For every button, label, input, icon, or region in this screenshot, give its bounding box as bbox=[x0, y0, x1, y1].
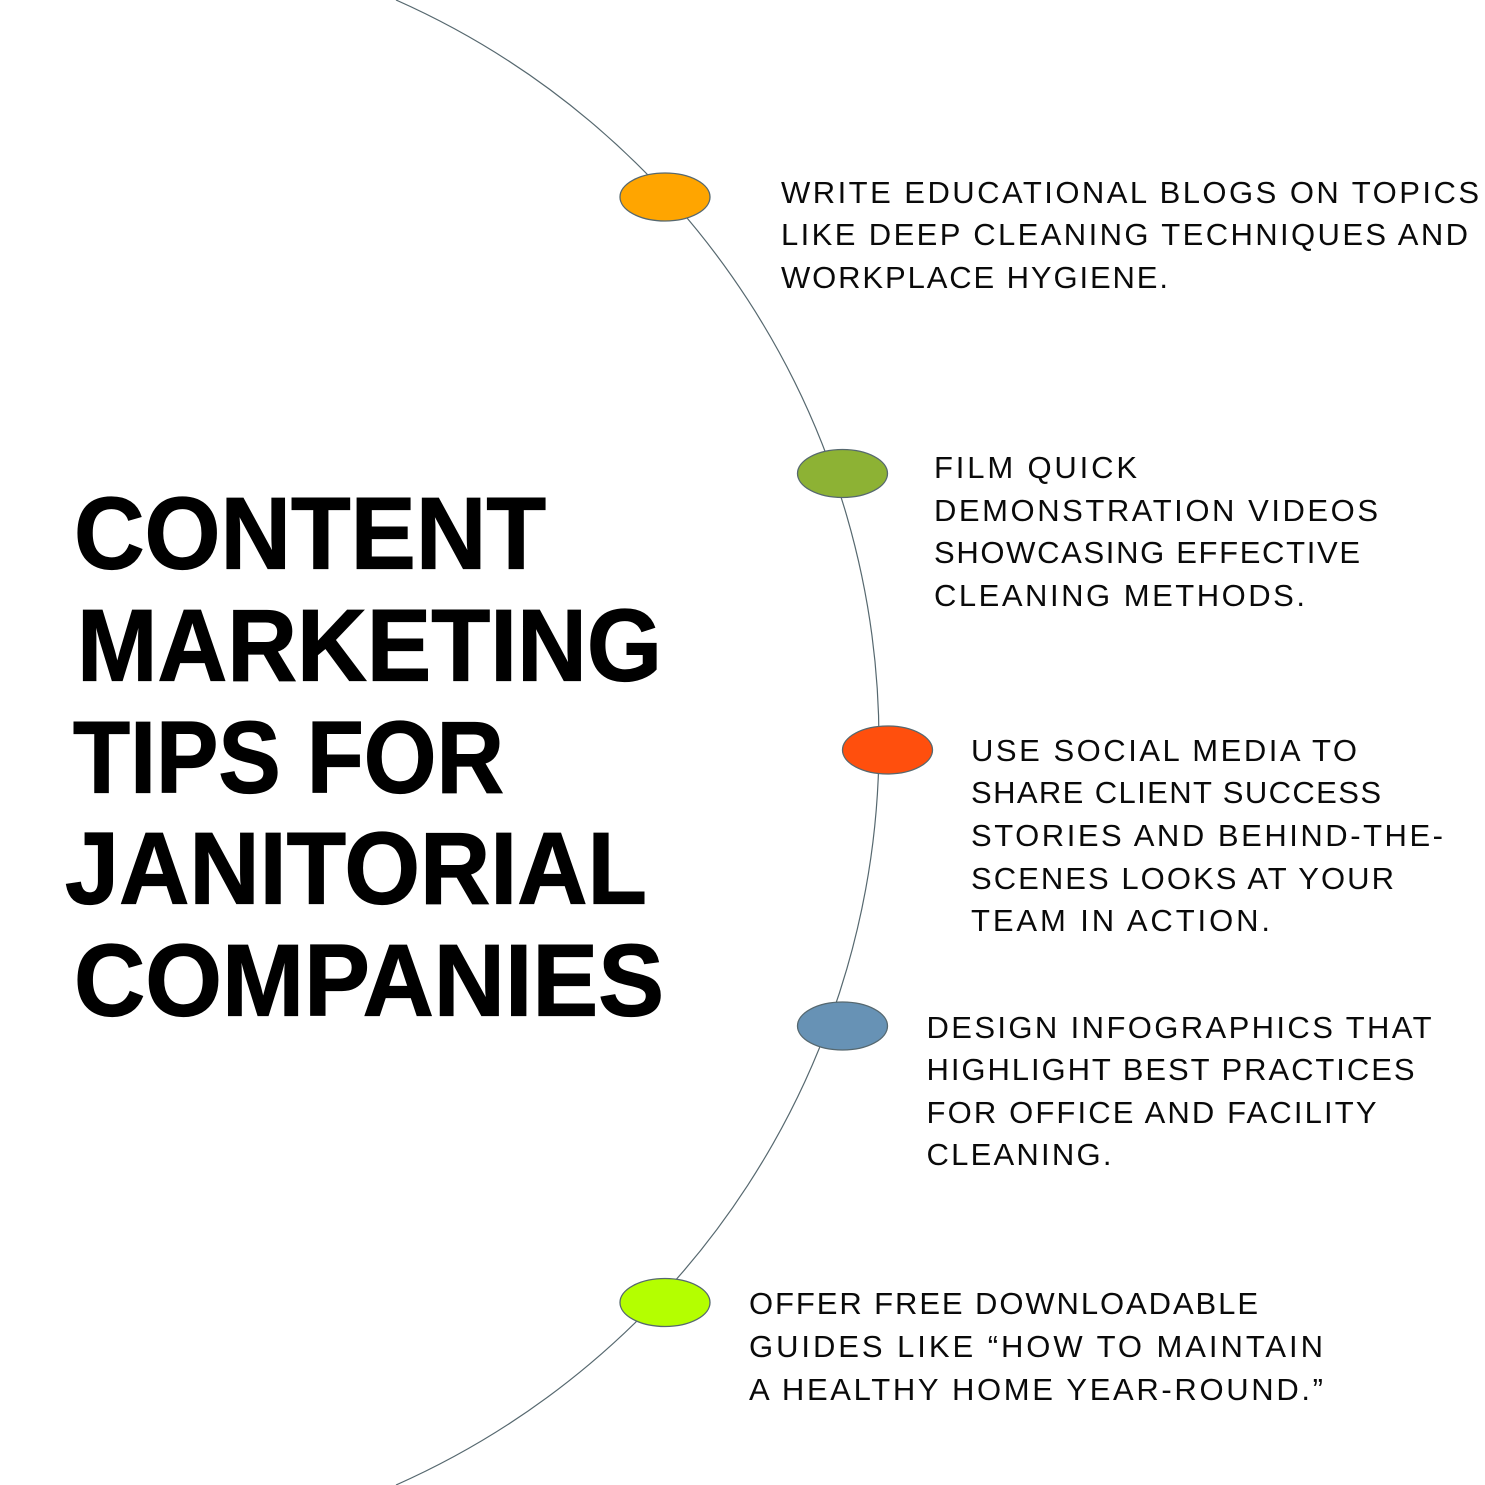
tip 2 text: FILM QUICK bbox=[934, 450, 1137, 485]
tip 2 text: CLEANING METHODS. bbox=[934, 578, 1305, 613]
tip 1: educational blogs bbox=[620, 173, 1479, 295]
tip 5: downloadable guides bbox=[620, 1278, 1323, 1407]
title: COMPANIES bbox=[74, 924, 664, 1038]
tip 3 text: TEAM IN ACTION. bbox=[971, 903, 1270, 938]
tip 4 text: FOR OFFICE AND FACILITY bbox=[926, 1095, 1376, 1130]
tip 1 text: WORKPLACE HYGIENE. bbox=[781, 260, 1168, 295]
title bbox=[65, 476, 664, 1038]
tip 4 text bbox=[926, 1010, 1432, 1172]
title: CONTENT bbox=[74, 476, 546, 590]
tip 5 text: A HEALTHY HOME YEAR-ROUND.” bbox=[749, 1372, 1323, 1407]
tip 1 text bbox=[781, 175, 1479, 295]
title: JANITORIAL bbox=[65, 812, 647, 926]
lime marker bbox=[620, 1278, 710, 1326]
tip 3 text: USE SOCIAL MEDIA TO bbox=[971, 733, 1357, 768]
tip 3 text: STORIES AND BEHIND-THE- bbox=[971, 818, 1443, 853]
tip 5 text: GUIDES LIKE “HOW TO MAINTAIN bbox=[749, 1329, 1323, 1364]
tip 3 text: SCENES LOOKS AT YOUR bbox=[971, 861, 1394, 896]
tip 4 text: DESIGN INFOGRAPHICS THAT bbox=[926, 1010, 1432, 1045]
tip 1 text: WRITE EDUCATIONAL BLOGS ON TOPICS bbox=[781, 175, 1479, 210]
title: MARKETING bbox=[77, 588, 662, 702]
tip 2 text bbox=[934, 450, 1378, 613]
tip 2 text: SHOWCASING EFFECTIVE bbox=[934, 535, 1360, 570]
blue marker bbox=[798, 1002, 888, 1050]
title: TIPS FOR bbox=[73, 700, 504, 814]
tip 3: social media bbox=[842, 726, 1443, 938]
tip 3 text bbox=[971, 733, 1443, 938]
tip 4: infographics bbox=[798, 1002, 1432, 1172]
tip 4 text: HIGHLIGHT BEST PRACTICES bbox=[926, 1052, 1414, 1087]
tip 2 text: DEMONSTRATION VIDEOS bbox=[934, 493, 1378, 528]
tip 5 text: OFFER FREE DOWNLOADABLE bbox=[749, 1286, 1258, 1321]
olive green marker bbox=[798, 450, 888, 498]
orange marker bbox=[620, 173, 710, 221]
timeline arc bbox=[396, 0, 879, 1485]
tip 5 text bbox=[749, 1286, 1323, 1407]
red-orange marker bbox=[842, 726, 932, 774]
tip 3 text: SHARE CLIENT SUCCESS bbox=[971, 775, 1381, 810]
tip 1 text: LIKE DEEP CLEANING TECHNIQUES AND bbox=[781, 217, 1468, 252]
tip 4 text: CLEANING. bbox=[926, 1137, 1112, 1172]
tip 2: demonstration videos bbox=[798, 450, 1378, 613]
